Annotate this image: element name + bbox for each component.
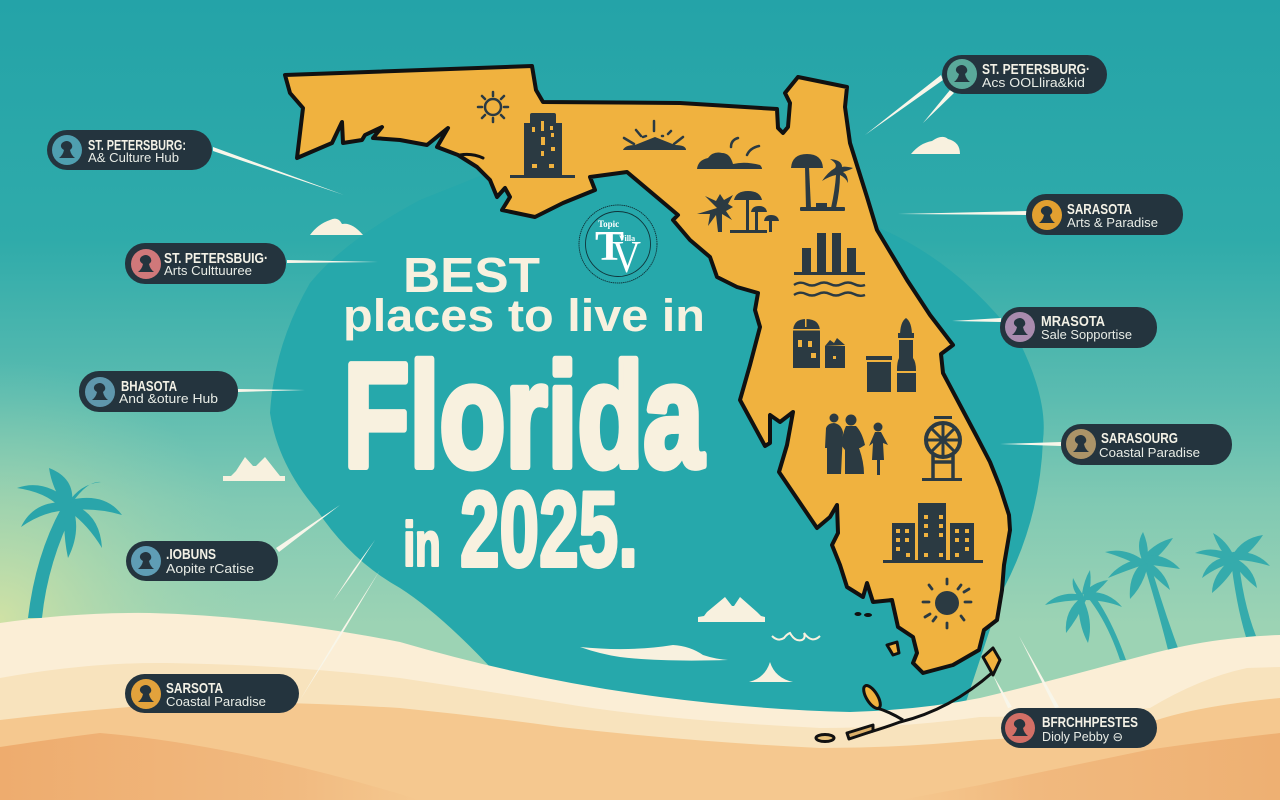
Florida Keys chain xyxy=(816,642,1000,742)
central teal bay blob xyxy=(270,120,1044,720)
label: St. Petersburg Arts Culture (top right): Acs OOLlira&kid xyxy=(982,76,1085,90)
cloud left xyxy=(310,219,363,235)
logo: Topic Villa TV: T xyxy=(595,224,624,270)
icon: ferris wheel xyxy=(922,416,962,481)
title line: Florida: Florida xyxy=(344,334,705,498)
beach band deep left xyxy=(0,733,420,800)
label: Sarasota Arts & Paradise: Arts & Paradise xyxy=(1067,216,1158,230)
beach sand bands xyxy=(0,613,1280,800)
label: St. Petersburg Arts Culture (top right): ST. PETERSBURG· xyxy=(982,61,1090,78)
state outline xyxy=(285,66,1010,673)
map of Florida xyxy=(285,66,1010,742)
logo: Topic Villa TV: V xyxy=(612,232,641,282)
boat left xyxy=(223,457,285,481)
icon: jar and lipstick bottle xyxy=(866,318,916,392)
label: Sarasota Arts & Paradise xyxy=(1026,194,1183,235)
sand bar xyxy=(580,645,728,661)
palm trees right xyxy=(1045,532,1270,660)
small islets xyxy=(854,612,872,617)
icon: tower building xyxy=(510,113,575,178)
label: St. Petersburg A& Culture Hub: ST. PETERSBURG: xyxy=(88,137,186,154)
palm tree B xyxy=(1105,532,1180,650)
title line: 2025.: 2025. xyxy=(460,469,638,589)
label: Sarasourg Coastal Paradise: SARASOURG xyxy=(1101,430,1178,447)
label: Sarasota Arts & Paradise: SARASOTA xyxy=(1067,201,1132,218)
beach band orange xyxy=(0,698,1280,800)
label: Bhasota And Nature Hub: BHASOTA xyxy=(121,378,177,395)
label: Sarasourg Coastal Paradise: Coastal Paradise xyxy=(1099,446,1200,460)
title line: places to live in: places to live in xyxy=(343,290,705,341)
label: Brchhpestes Dioly Pebby: Dioly Pebby ⊖ xyxy=(1042,730,1123,744)
logo: Topic Villa TV xyxy=(579,205,657,283)
title line: in: in xyxy=(404,510,440,580)
palm tree left xyxy=(17,468,122,618)
icon: downtown buildings xyxy=(883,503,983,563)
icon: sunrise mound xyxy=(623,121,686,150)
logo: Topic Villa TV: Topic xyxy=(598,219,619,229)
icon: beach umbrella and palm xyxy=(791,154,853,211)
label: Mrasota Sale Sopportise: Sale Sopportise xyxy=(1041,328,1132,342)
map icons xyxy=(478,92,983,628)
water waves xyxy=(772,633,820,640)
label: Bhasota And Nature Hub xyxy=(79,371,238,412)
label: St. Petersburg Arts Culture: Arts Culttuuree xyxy=(164,264,252,278)
icon: small sun xyxy=(478,92,508,122)
label: Iobuns Aopite rCatise: .IOBUNS xyxy=(166,546,216,563)
title line: BEST: BEST xyxy=(403,249,540,303)
cream clouds, boats, waves xyxy=(223,137,960,682)
icon: family silhouettes xyxy=(825,414,888,475)
label: St. Petersburg Arts Culture: ST. PETERSBUIG· xyxy=(164,250,268,267)
palm tree C xyxy=(1195,533,1270,637)
label: St. Petersburg A& Culture Hub: A& Culture Hub xyxy=(88,151,179,165)
icon: large sun xyxy=(923,579,971,628)
label: St. Petersburg Arts Culture xyxy=(125,243,286,284)
title xyxy=(343,249,705,589)
boat centre xyxy=(698,597,765,622)
icon: skyline with waves xyxy=(794,233,865,296)
icon: domed buildings xyxy=(793,319,845,368)
label: St. Petersburg A& Culture Hub xyxy=(47,130,212,170)
label: Brchhpestes Dioly Pebby xyxy=(1001,708,1157,748)
label: Bhasota And Nature Hub: And &oture Hub xyxy=(119,392,218,406)
label: Sarasourg Coastal Paradise xyxy=(1061,424,1232,465)
label: Mrasota Sale Sopportise: MRASOTA xyxy=(1041,313,1105,330)
sail xyxy=(749,662,793,682)
palm tree A xyxy=(1045,570,1126,660)
label: Mrasota Sale Sopportise xyxy=(1000,307,1157,348)
beach band cream xyxy=(0,663,1280,800)
label: Sarsota Coastal Paradise: Coastal Paradise xyxy=(166,695,266,709)
beach band deep right xyxy=(900,733,1280,800)
label: Iobuns Aopite rCatise: Aopite rCatise xyxy=(166,562,254,576)
label: Iobuns Aopite rCatise xyxy=(126,541,278,581)
icon: clouds over dune xyxy=(697,138,762,169)
label: Sarsota Coastal Paradise xyxy=(125,674,299,713)
leader lines xyxy=(213,75,1061,708)
beach band light xyxy=(0,613,1280,800)
label: Brchhpestes Dioly Pebby: BFRCHHPESTES xyxy=(1042,714,1138,731)
icon: palm and mushroom umbrellas xyxy=(697,191,779,233)
label: St. Petersburg Arts Culture (top right) xyxy=(942,55,1107,94)
coast notch xyxy=(460,154,483,158)
logo: Topic Villa TV: Villa xyxy=(619,234,635,243)
label: Sarsota Coastal Paradise: SARSOTA xyxy=(166,680,223,697)
cloud right xyxy=(911,137,960,154)
